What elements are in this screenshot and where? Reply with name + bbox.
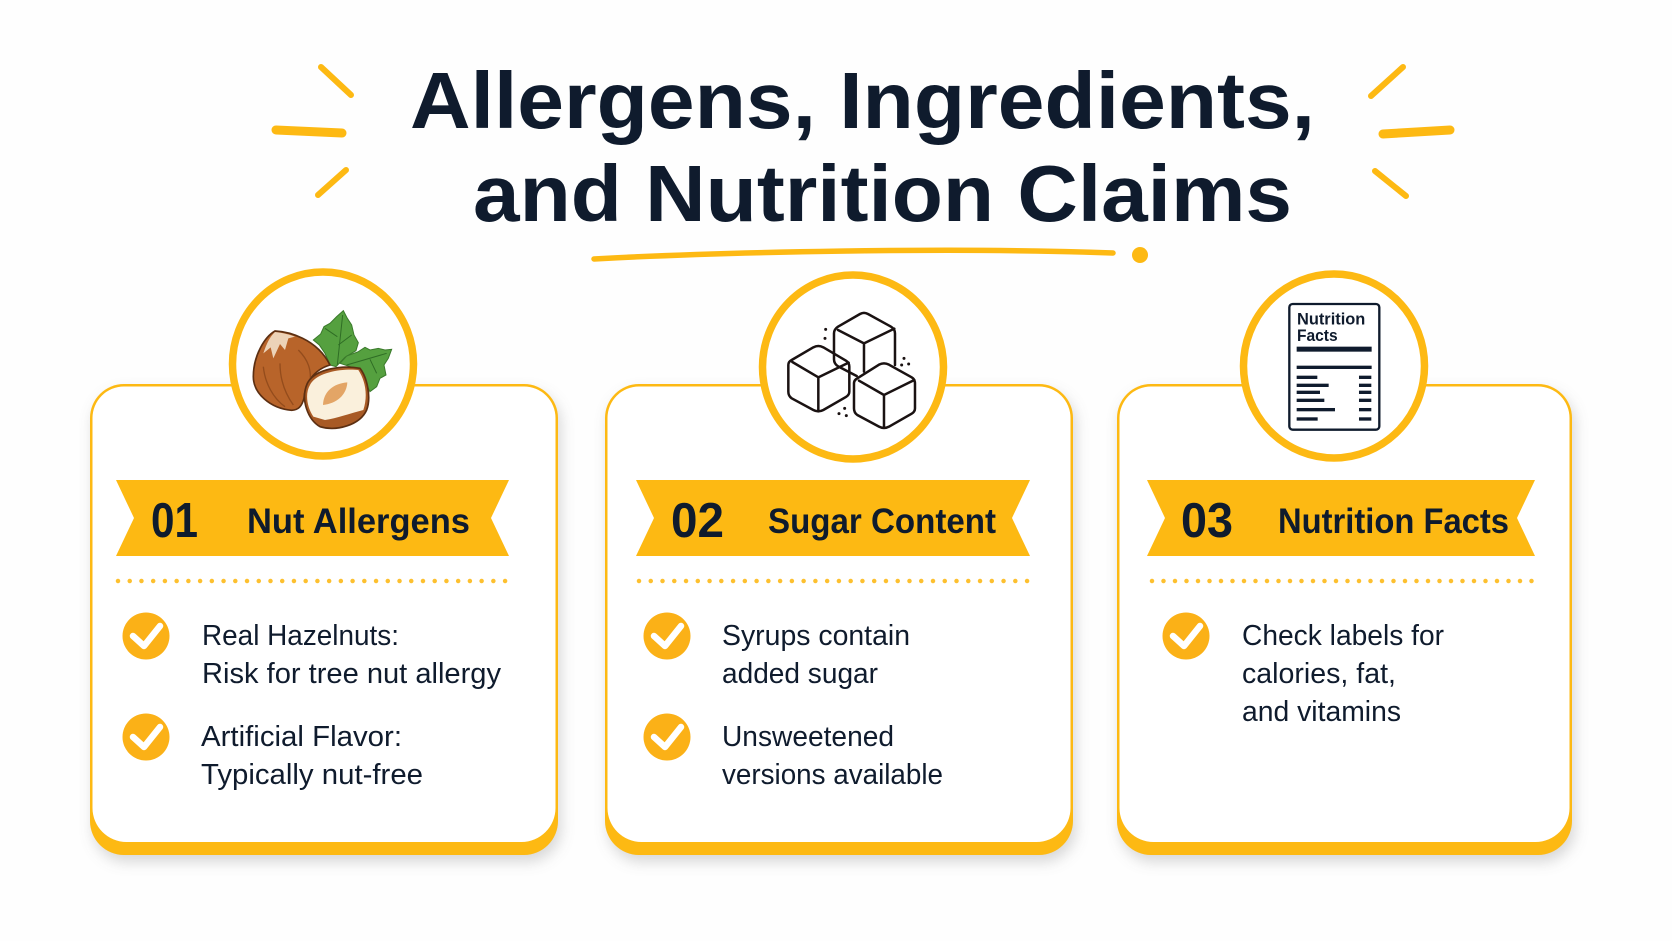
title: and Nutrition Claims	[473, 149, 1292, 238]
ribbon: 01 Nut Allergens: 01	[151, 494, 198, 548]
panel: sugar content	[605, 275, 1073, 855]
title	[410, 56, 1315, 238]
card background	[1117, 384, 1572, 855]
icon: sugar cubes	[762, 275, 944, 459]
card background	[605, 384, 1073, 855]
icon: nutrition label: Facts	[1297, 326, 1338, 345]
list item: syrups: added sugar	[722, 658, 878, 690]
ribbon: 03 Nutrition Facts	[1147, 480, 1535, 556]
ribbon: 02 Sugar Content: Sugar Content	[768, 502, 996, 541]
list item: artificial flavor: Typically nut-free	[201, 759, 423, 791]
list item: real hazelnuts: Risk for tree nut allergy	[202, 658, 501, 690]
ribbon: 01 Nut Allergens	[116, 480, 509, 556]
list item: check labels	[1162, 612, 1444, 728]
title underline with dot	[594, 247, 1148, 263]
list item: syrups	[644, 612, 910, 690]
ribbon: 02 Sugar Content	[636, 480, 1030, 556]
list item: artificial flavor	[122, 714, 423, 791]
title: Allergens, Ingredients,	[410, 56, 1315, 145]
ribbon: 02 Sugar Content: 02	[671, 494, 724, 548]
list item: unsweetened	[644, 714, 943, 791]
list item: real hazelnuts: Real Hazelnuts:	[202, 620, 399, 652]
list item: real hazelnuts	[122, 612, 501, 690]
card background	[90, 384, 558, 855]
panel: nutrition facts	[1117, 274, 1572, 855]
list item: check labels: and vitamins	[1242, 696, 1401, 728]
panel: nut allergens	[90, 272, 558, 855]
right sunburst accent	[1371, 67, 1450, 196]
icon: nutrition label: Nutrition	[1297, 309, 1365, 328]
list item: artificial flavor: Artificial Flavor:	[201, 721, 402, 753]
list item: unsweetened: Unsweetened	[722, 721, 894, 753]
list item: syrups: Syrups contain	[722, 620, 910, 652]
ribbon: 03 Nutrition Facts: Nutrition Facts	[1278, 502, 1509, 541]
list item: check labels: calories, fat,	[1242, 658, 1396, 690]
left sunburst accent	[276, 67, 351, 195]
ribbon: 03 Nutrition Facts: 03	[1181, 494, 1233, 548]
icon: nutrition label	[1244, 274, 1424, 458]
icon: hazelnuts	[232, 272, 414, 456]
list item: unsweetened: versions available	[722, 759, 943, 791]
list item: check labels: Check labels for	[1242, 620, 1444, 652]
ribbon: 01 Nut Allergens: Nut Allergens	[247, 502, 470, 541]
